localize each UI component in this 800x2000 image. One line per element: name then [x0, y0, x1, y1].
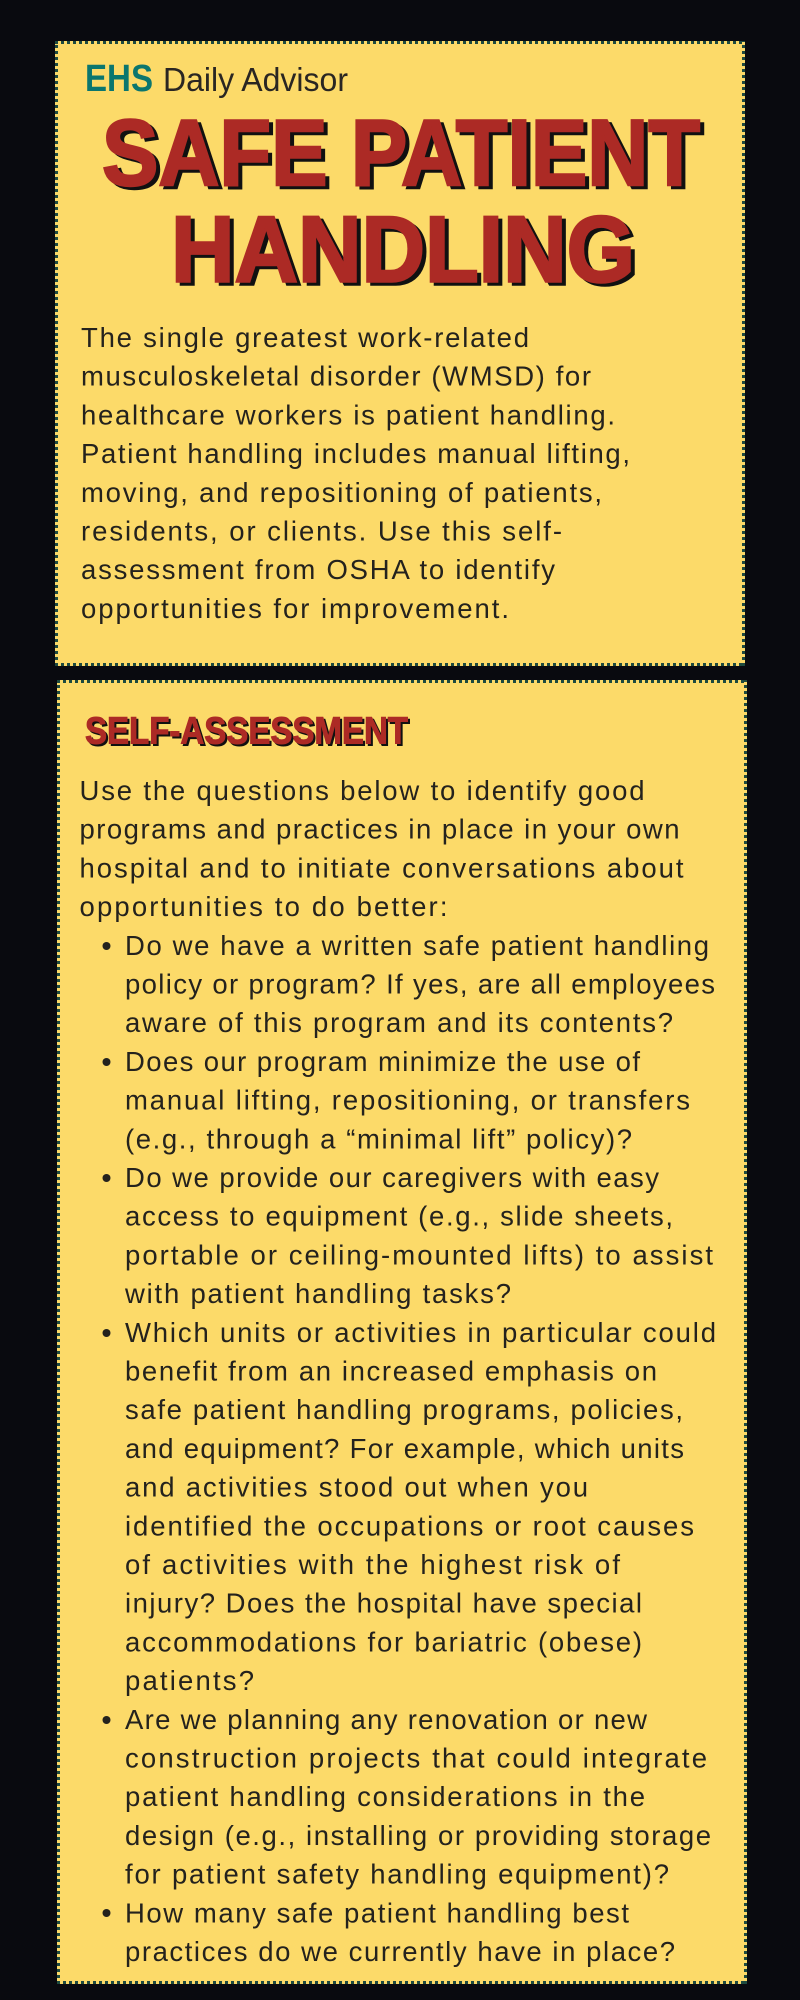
self-assessment intro text: Use the questions below to identify good [80, 775, 644, 806]
question: equipment access [102, 1162, 713, 1309]
question: minimal lift: (e.g., through a “minimal lift” policy)? [125, 1123, 632, 1154]
question: minimal lift: manual lifting, repositioning, or transfers [125, 1085, 690, 1116]
self-assessment intro text [80, 775, 684, 922]
self-assessment intro text: hospital and to initiate conversations about [80, 852, 684, 883]
intro paragraph: musculoskeletal disorder (WMSD) for [81, 361, 591, 392]
question: best practices [102, 1897, 675, 1967]
question: written policy [102, 930, 715, 1038]
question: units and activities: and equipment? For example, which units [125, 1433, 684, 1464]
question: units and activities: injury? Does the hospital have special [125, 1588, 642, 1619]
question: units and activities: patients? [125, 1665, 254, 1696]
question: written policy: policy or program? If yes, are all employees [125, 968, 715, 1000]
question: written policy: aware of this program and its contents? [125, 1007, 673, 1038]
question: units and activities: safe patient handling programs, policies, [125, 1394, 683, 1425]
question: renovation projects [102, 1704, 711, 1890]
question: units and activities [102, 1317, 716, 1696]
question: minimal lift [102, 1046, 690, 1154]
question: equipment access: access to equipment (e.g., slide sheets, [125, 1201, 673, 1232]
intro paragraph: opportunities for improvement. [81, 593, 509, 624]
question: units and activities: Which units or activities in particular could [125, 1317, 716, 1348]
question: renovation projects: construction projects that could integrate [125, 1742, 707, 1774]
intro paragraph: residents, or clients. Use this self- [81, 516, 562, 546]
question: units and activities: and activities stood out when you [125, 1472, 588, 1503]
panel: introduction [55, 41, 745, 666]
intro paragraph: The single greatest work-related [81, 322, 529, 353]
title: Safe Patient Handling [102, 100, 704, 304]
title: Safe Patient Handling: SAFE PATIENT [106, 103, 704, 208]
logo: EHS Daily Advisor: Daily Advisor [163, 61, 348, 98]
title: Safe Patient Handling: HANDLING [171, 196, 635, 302]
logo: EHS Daily Advisor [85, 58, 348, 100]
question list [102, 930, 716, 1967]
question: units and activities: identified the occupations or root causes [125, 1510, 694, 1541]
heading: self-assessment: SELF-ASSESSMENT [85, 710, 408, 752]
question: units and activities: of activities with the highest risk of [125, 1549, 620, 1580]
question: written policy: Do we have a written safe patient handling [125, 930, 709, 961]
question: minimal lift: Does our program minimize the use of [125, 1046, 640, 1077]
question: renovation projects: design (e.g., installing or providing storage [125, 1820, 711, 1851]
question: best practices: How many safe patient handling best [125, 1897, 629, 1928]
question: best practices: practices do we currently have in place? [125, 1936, 675, 1967]
intro paragraph: healthcare workers is patient handling. [81, 399, 615, 430]
intro paragraph: assessment from OSHA to identify [81, 554, 555, 585]
question: units and activities: accommodations for bariatric (obese) [125, 1626, 642, 1657]
question: renovation projects: patient handling considerations in the [125, 1781, 645, 1812]
question: equipment access: Do we provide our caregivers with easy [125, 1162, 659, 1193]
question: equipment access: portable or ceiling-mounted lifts) to assist [125, 1239, 713, 1270]
self-assessment intro text: opportunities to do better: [80, 891, 448, 922]
title: Safe Patient Handling: HANDLING [175, 200, 639, 304]
question: units and activities: benefit from an increased emphasis on [125, 1356, 657, 1386]
question: renovation projects: Are we planning any renovation or new [125, 1704, 647, 1735]
intro paragraph: moving, and repositioning of patients, [81, 477, 602, 508]
logo: EHS Daily Advisor: EHS [85, 58, 153, 100]
self-assessment intro text: programs and practices in place in your own [80, 814, 680, 845]
panel: self-assessment [57, 680, 747, 1984]
intro paragraph [81, 322, 630, 624]
question: renovation projects: for patient safety handling equipment)? [125, 1859, 669, 1890]
intro paragraph: Patient handling includes manual lifting, [81, 438, 630, 469]
question: equipment access: with patient handling tasks? [124, 1278, 511, 1309]
title: Safe Patient Handling: SAFE PATIENT [102, 100, 700, 205]
heading: self-assessment: SELF-ASSESSMENT [87, 712, 410, 754]
